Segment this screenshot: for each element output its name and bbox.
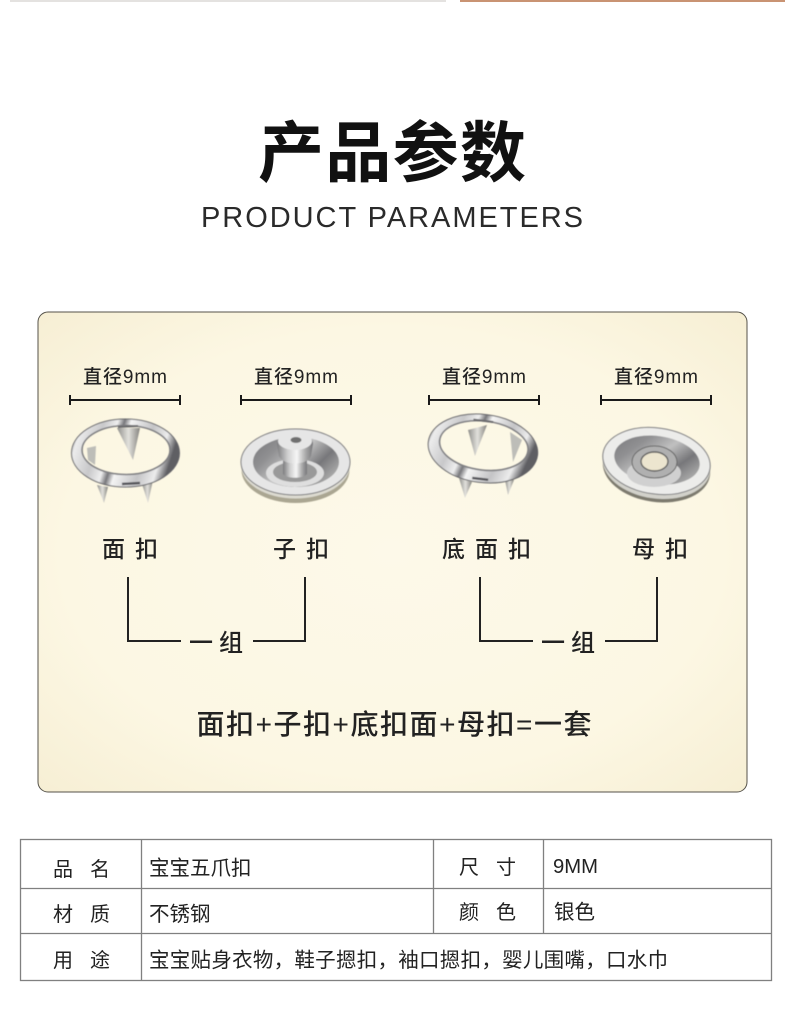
diameter label 2 xyxy=(241,366,351,405)
icon: socket snap xyxy=(598,421,715,509)
table: product specs xyxy=(20,840,772,980)
row 2: 不锈钢 xyxy=(149,903,210,926)
row 2: 银色 xyxy=(554,901,595,924)
label: 面扣: 面扣 xyxy=(102,536,168,562)
row 2: 颜色 xyxy=(459,901,533,924)
diameter label 4 xyxy=(601,366,711,405)
top image strip: photo xyxy=(460,0,785,2)
bracket: first group xyxy=(128,577,305,657)
diameter label 1 xyxy=(70,366,180,405)
title: 产品参数 xyxy=(258,116,526,190)
row 1: 9MM xyxy=(553,856,598,878)
formula: 面扣+子扣+底扣面+母扣=一套 xyxy=(196,709,592,740)
row 2 xyxy=(53,901,595,926)
subtitle: PRODUCT PARAMETERS xyxy=(201,202,583,234)
row 1: 宝宝五爪扣 xyxy=(149,857,252,880)
icon: stud snap xyxy=(241,429,350,503)
diameter label 2: 直径9mm xyxy=(254,366,338,388)
diameter label 3 xyxy=(429,366,539,405)
diameter label 4: 直径9mm xyxy=(614,366,698,388)
diameter label 3: 直径9mm xyxy=(442,366,526,388)
diameter label 1: 直径9mm xyxy=(83,366,167,388)
row 1: 品名 xyxy=(53,858,127,881)
panel: product parts xyxy=(38,312,747,792)
bracket: second group xyxy=(480,577,657,657)
top image strip: grey xyxy=(10,0,446,2)
label: 底面扣: 底面扣 xyxy=(442,536,541,562)
row 3: 用途 xyxy=(53,949,127,972)
row 1: 尺寸 xyxy=(459,856,533,879)
icon: cap ring snap xyxy=(72,419,180,503)
bracket: first group: 一组 xyxy=(189,630,249,657)
row 2: 材质 xyxy=(53,903,127,926)
label: 子扣: 子扣 xyxy=(273,536,339,562)
row 3: 宝宝贴身衣物，鞋子摁扣，袖口摁扣，婴儿围嘴，口水巾 xyxy=(149,949,668,972)
bracket: second group: 一组 xyxy=(541,630,601,657)
icon: base ring snap xyxy=(424,408,542,498)
row 1 xyxy=(53,856,598,881)
label: 母扣: 母扣 xyxy=(632,536,698,562)
